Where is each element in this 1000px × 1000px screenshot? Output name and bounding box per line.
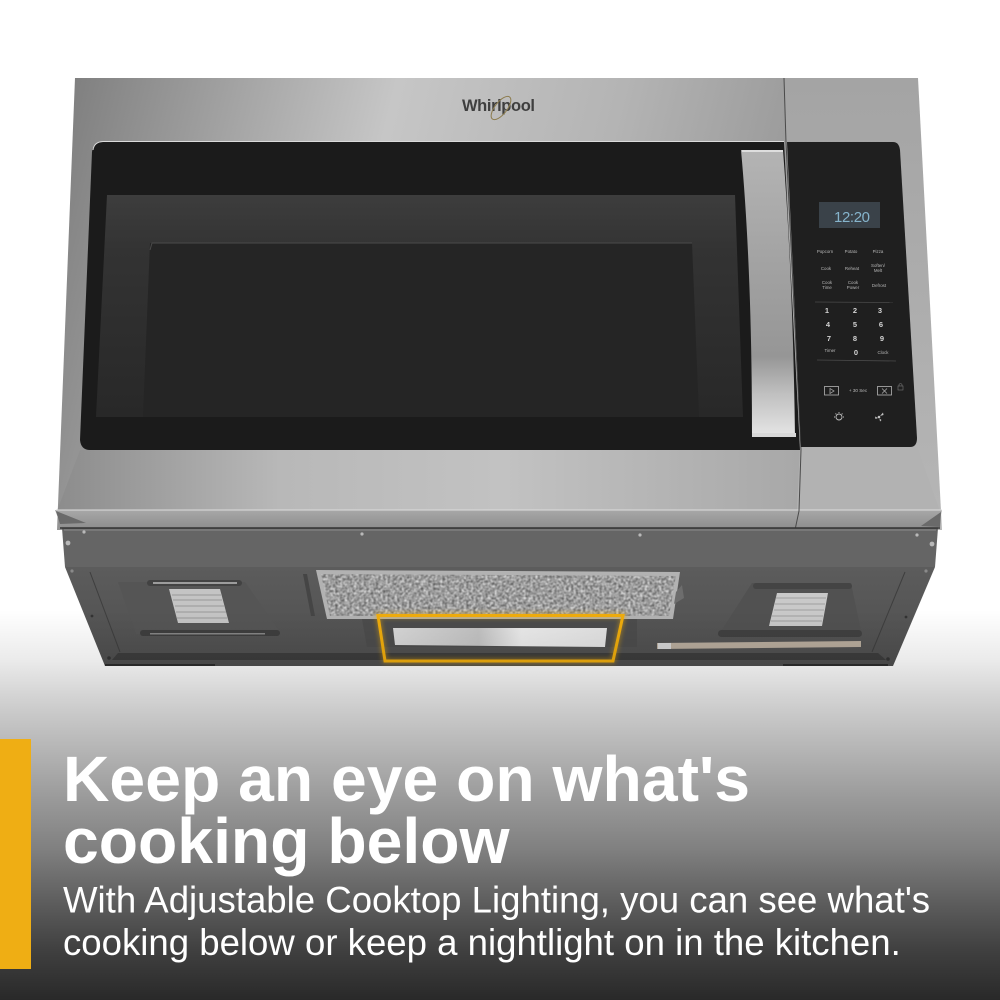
divider between door and controls xyxy=(784,78,801,530)
microwave door panel xyxy=(57,78,799,530)
clock display xyxy=(819,202,880,228)
lower control trim xyxy=(797,447,940,511)
cooking buttons: Time xyxy=(822,285,832,290)
highlighted cooktop light outline xyxy=(378,616,623,661)
cooking buttons: Melt xyxy=(874,268,883,273)
dark gradient overlay xyxy=(0,610,1000,1000)
cooking buttons: Cook xyxy=(821,266,832,271)
door handle xyxy=(741,150,796,437)
cooking buttons: Defrost xyxy=(872,283,887,288)
heading xyxy=(63,743,750,877)
description xyxy=(63,880,930,963)
cooking buttons: Pizza xyxy=(873,249,884,254)
keypad: 5 xyxy=(853,320,857,329)
front lip xyxy=(62,528,938,567)
start button xyxy=(824,386,838,395)
light housing xyxy=(362,619,637,647)
strip highlight xyxy=(56,509,942,511)
filter clip xyxy=(674,585,684,604)
keypad: 7 xyxy=(827,334,831,343)
description: With Adjustable Cooktop Lighting, you can see what's xyxy=(63,880,930,920)
underside of the microwave xyxy=(60,528,940,666)
keypad: 9 xyxy=(880,334,884,343)
bottom edge strip xyxy=(55,510,942,528)
heading: cooking below xyxy=(63,805,511,877)
brand logo: Whirlpool xyxy=(462,97,535,115)
control panel xyxy=(787,142,917,447)
warning label xyxy=(657,641,861,649)
cooking buttons: Reheat xyxy=(845,266,860,271)
door window surround xyxy=(80,142,800,450)
inner cavity frame xyxy=(96,195,743,417)
keypad: Clock xyxy=(878,350,889,355)
left recessed panel xyxy=(118,580,280,636)
window highlight xyxy=(93,142,784,150)
lock icon xyxy=(898,384,903,390)
keypad: 8 xyxy=(853,334,857,343)
heading: Keep an eye on what's xyxy=(63,743,750,815)
cooking buttons: Popcorn xyxy=(817,249,834,254)
lower edge shadow xyxy=(112,653,886,660)
grease filter mesh xyxy=(321,574,676,616)
add thirty seconds label: + 30 Sec xyxy=(849,388,868,393)
control panel housing xyxy=(784,78,942,530)
microwave xyxy=(55,78,942,530)
screws xyxy=(66,530,934,661)
cooking buttons: Potato xyxy=(845,249,858,254)
side bevel lines xyxy=(90,572,905,652)
cooktop light lens xyxy=(393,628,607,647)
lower door trim xyxy=(57,450,800,511)
grease filter frame xyxy=(316,570,680,619)
description: cooking below or keep a nightlight on in the kitchen. xyxy=(63,922,901,963)
right corner bracket xyxy=(921,512,941,527)
keypad: 2 xyxy=(853,306,857,315)
underside base xyxy=(65,567,935,666)
right label text lines xyxy=(771,598,826,621)
cooking buttons: Cook xyxy=(822,280,833,285)
left spec label xyxy=(169,589,229,623)
keypad: 1 xyxy=(825,306,829,315)
accent bar xyxy=(0,739,31,969)
inner window highlight xyxy=(150,243,692,250)
top shadow line xyxy=(60,527,940,529)
brand logo xyxy=(462,93,535,123)
left label text lines xyxy=(172,595,227,618)
keypad: Timer xyxy=(824,348,836,353)
cooking buttons: Cook xyxy=(848,280,859,285)
cooking buttons: Soften/ xyxy=(871,263,886,268)
right spec label xyxy=(769,593,828,626)
fan icon xyxy=(875,412,884,422)
keypad: 0 xyxy=(854,348,858,357)
keypad: 6 xyxy=(879,320,883,329)
left side slot xyxy=(303,574,315,616)
inner cavity window xyxy=(143,243,699,417)
left corner bracket xyxy=(56,511,86,524)
keypad: 3 xyxy=(878,306,882,315)
lip highlight xyxy=(64,529,936,531)
clock display: 12:20 xyxy=(834,209,870,226)
keypad: 4 xyxy=(826,320,831,329)
amber glow xyxy=(378,616,623,661)
cooking buttons xyxy=(817,249,887,290)
base shadow marks xyxy=(105,664,888,666)
light icon xyxy=(834,412,844,420)
cooking buttons: Power xyxy=(847,285,860,290)
cancel button xyxy=(878,386,892,395)
right recessed panel xyxy=(718,583,862,637)
keypad rules xyxy=(815,302,896,361)
keypad xyxy=(824,306,889,357)
